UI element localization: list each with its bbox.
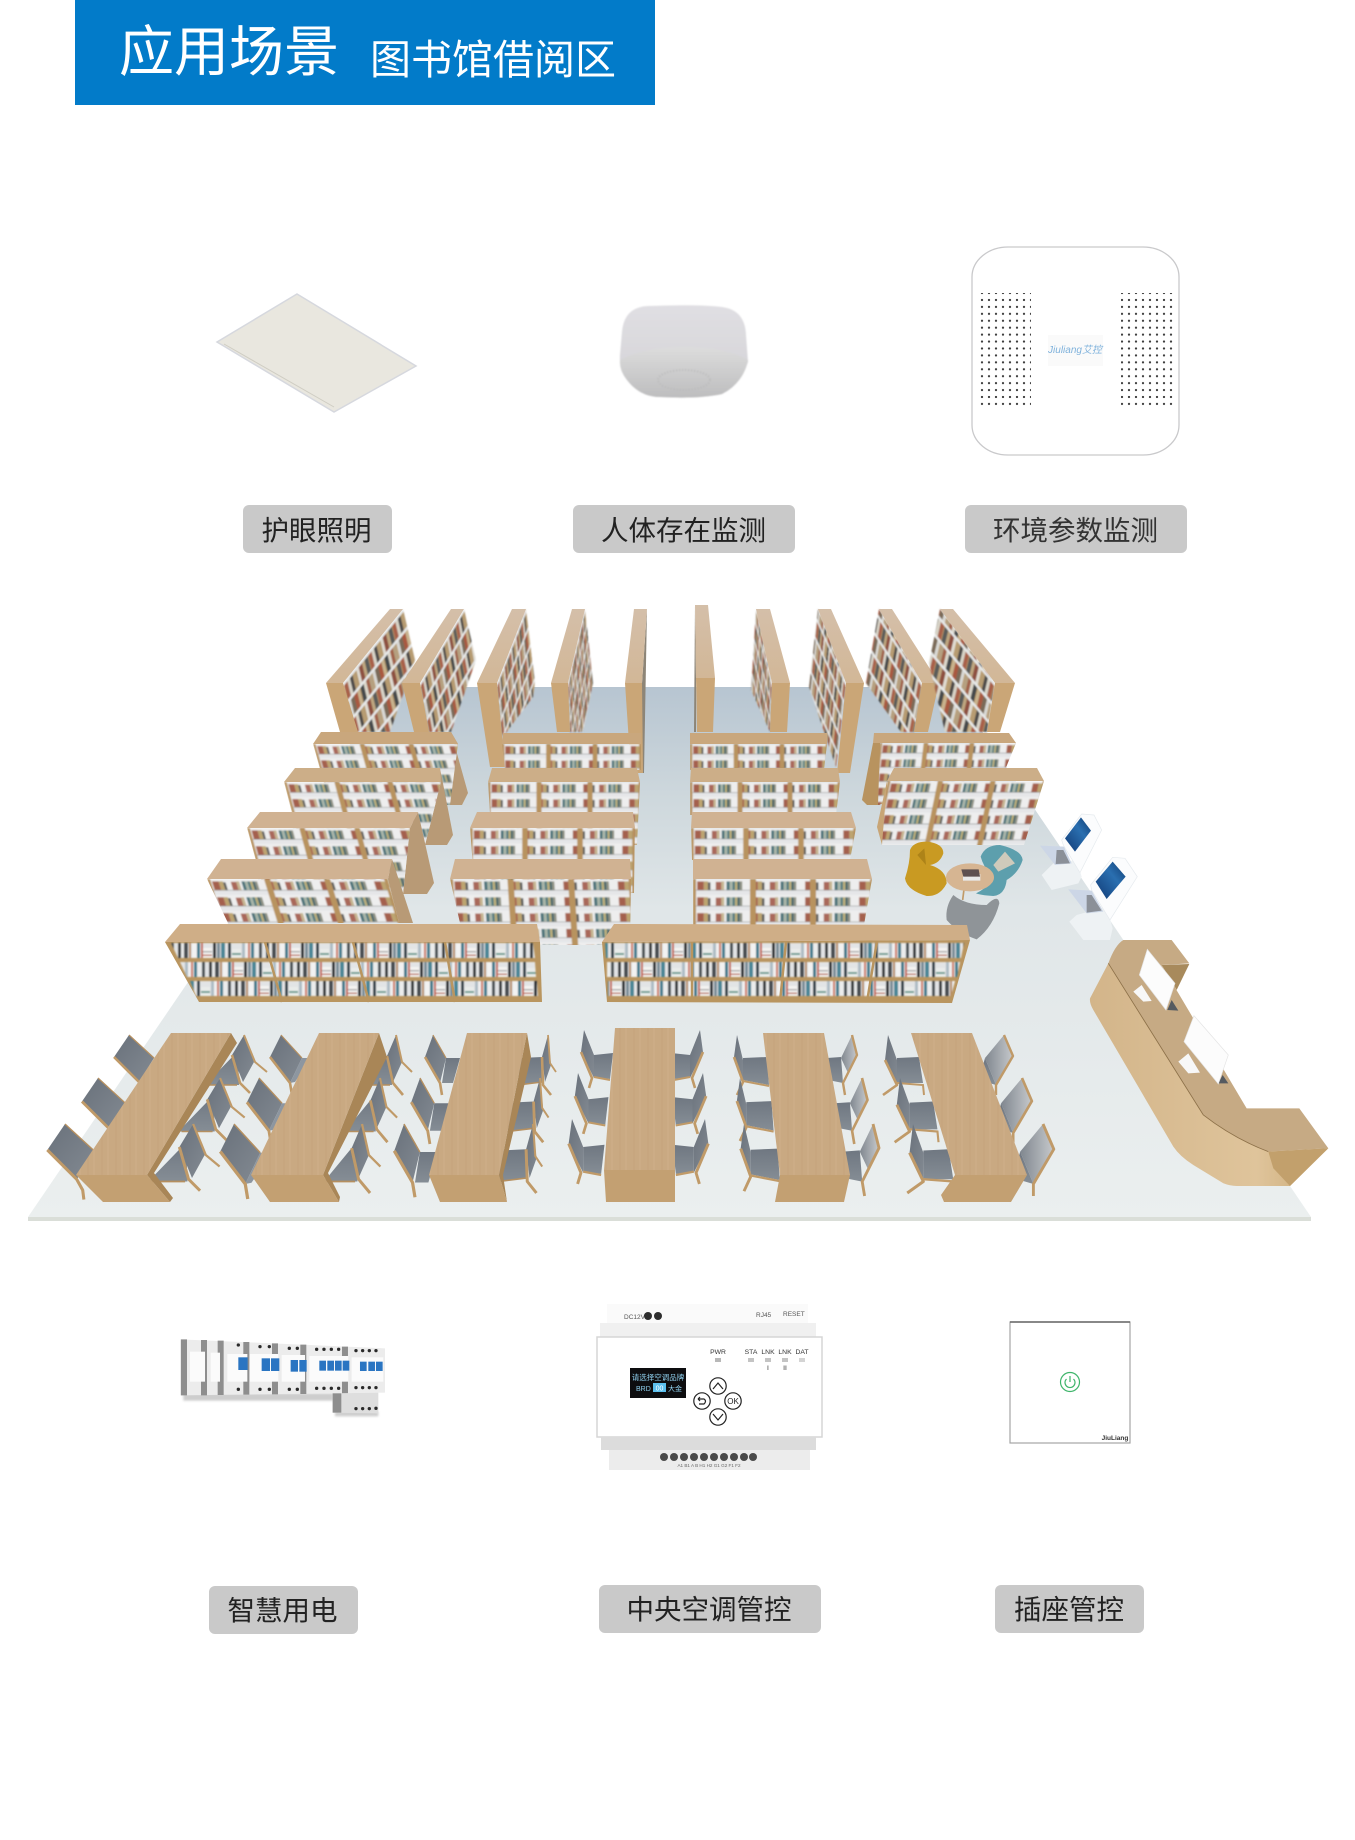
chair: grey: [946, 895, 999, 939]
top port labels: DC12V: [624, 1314, 646, 1321]
top port labels: [624, 1311, 805, 1321]
reception desk: [1090, 940, 1328, 1186]
centre-left block of mid bookshelves: [450, 733, 642, 951]
label: 护眼照明: 护眼照明: [262, 515, 372, 546]
display screen: 大金: [668, 1384, 682, 1393]
reading table 6 with chairs: [883, 1033, 1054, 1202]
round table: [946, 863, 994, 900]
reading table 4 with chairs: [569, 1028, 708, 1202]
right block of mid bookshelves: [862, 733, 1046, 853]
label: 人体存在监测: [573, 505, 795, 553]
chair: mustard: [905, 842, 947, 896]
top port labels: RESET: [783, 1311, 805, 1318]
label: 插座管控: [995, 1585, 1144, 1633]
label: 环境参数监测: [965, 505, 1187, 553]
reading table 2 with chairs: [220, 1033, 412, 1202]
status indicators: LNK: [778, 1349, 792, 1356]
top port labels: RJ45: [756, 1312, 772, 1319]
monitor 2: [1178, 1016, 1228, 1084]
self-service kiosk 1: [1040, 814, 1102, 890]
centre-right block of mid bookshelves: [690, 733, 872, 924]
reading table 3 with chairs: [394, 1033, 556, 1202]
control buttons: [694, 1378, 741, 1425]
banner heading: 应用场景: 应用场景: [119, 21, 339, 83]
status indicators: STA: [745, 1349, 758, 1356]
back row of tall bookshelves: [326, 605, 1015, 773]
long bookshelf: front right: [602, 924, 970, 1003]
device: presence sensor: [620, 305, 748, 398]
reading table 5 with chairs: [734, 1033, 879, 1202]
lounge chairs and round table: [905, 842, 1023, 939]
label: 中央空调管控: 中央空调管控: [626, 1594, 792, 1625]
label: 环境参数监测: 环境参数监测: [993, 515, 1158, 546]
status indicators: II: [783, 1365, 787, 1372]
banner subheading: 图书馆借阅区: 图书馆借阅区: [370, 37, 616, 83]
chair: teal: [976, 845, 1023, 896]
library floor: [28, 687, 1311, 1221]
device: environment sensor: [972, 247, 1179, 455]
device: central air-conditioning controller: [597, 1304, 822, 1470]
label: 人体存在监测: 人体存在监测: [601, 515, 766, 546]
monitor 1: [1133, 949, 1178, 1011]
reading table 1 with chairs: [47, 1033, 267, 1202]
wiring terminals: [660, 1453, 757, 1468]
label: 智慧用电: 智慧用电: [228, 1595, 338, 1626]
display screen: 00: [656, 1386, 663, 1392]
control buttons: OK: [727, 1397, 739, 1406]
status indicators: PWR: [710, 1349, 726, 1356]
label: 护眼照明: [243, 505, 392, 553]
self-service kiosk 2: [1068, 857, 1137, 940]
left block of mid bookshelves: [207, 732, 468, 923]
display screen: [630, 1368, 686, 1398]
power icon: [1060, 1372, 1080, 1392]
label: 智慧用电: [209, 1586, 358, 1634]
status indicators: I: [767, 1365, 769, 1372]
label: 中央空调管控: [599, 1585, 821, 1633]
switch logo: JiuLiang: [1102, 1435, 1128, 1442]
device: socket touch switch: [1010, 1322, 1130, 1443]
display screen: 请选择空调品牌: [632, 1372, 685, 1382]
title banner: [75, 0, 655, 105]
device: smart circuit breakers: [180, 1339, 385, 1416]
status indicators: [710, 1349, 809, 1372]
long bookshelf: front left: [165, 924, 542, 1002]
display screen: BRD: [636, 1386, 651, 1393]
status indicators: DAT: [795, 1349, 809, 1356]
status indicators: LNK: [761, 1349, 775, 1356]
wiring terminals: A1 B1 A B H1 H2 G1 G2 F1 F2: [677, 1463, 741, 1468]
sensor logo: Jiuliang艾控: [1047, 344, 1104, 356]
label: 插座管控: 插座管控: [1014, 1594, 1124, 1625]
device: eye-care panel light: [217, 294, 416, 412]
